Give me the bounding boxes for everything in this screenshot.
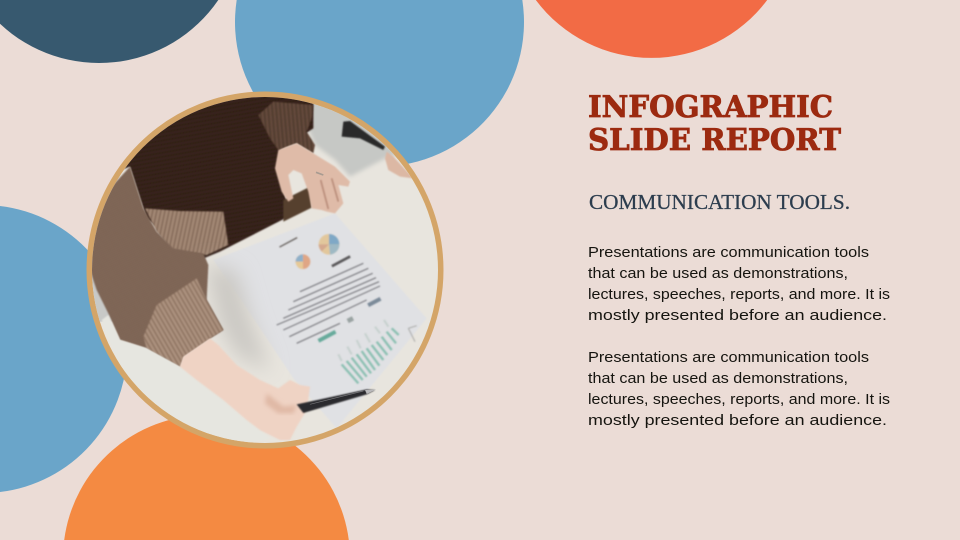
photo: hands over a printed report	[92, 97, 438, 443]
paragraph 2	[588, 350, 890, 429]
title: SLIDE REPORT	[588, 123, 842, 158]
right sleeve	[258, 102, 315, 153]
shadow beneath hand	[283, 187, 312, 222]
pie chart large	[318, 234, 331, 256]
report contents	[277, 234, 417, 383]
lower arm and hand	[180, 338, 310, 440]
paragraph 2: Presentations are communication tools	[588, 350, 869, 366]
bar chart	[342, 328, 399, 383]
photo ring	[90, 94, 440, 446]
left sleeve	[90, 167, 223, 367]
paper	[336, 426, 338, 428]
paragraph 2: that can be used as demonstrations,	[588, 371, 848, 387]
pie chart small	[296, 254, 310, 269]
subtitle: COMMUNICATION TOOLS.	[589, 190, 850, 214]
green stat labels	[318, 330, 336, 343]
circle: blue top centre	[235, 0, 524, 167]
circle: red-orange top right	[536, 0, 767, 58]
grey patch left	[92, 275, 112, 322]
far hand	[385, 152, 413, 178]
upper sleeve band	[145, 208, 228, 255]
text lines	[277, 263, 380, 343]
paragraph 2: lectures, speeches, reports, and more. It is	[588, 392, 890, 408]
lower table corner	[102, 315, 252, 442]
paragraph 1: Presentations are communication tools	[588, 245, 869, 261]
jumper body	[124, 97, 314, 258]
shoe	[342, 121, 385, 150]
pen highlight	[310, 391, 363, 404]
floor	[298, 100, 396, 177]
sleeve cuff	[143, 278, 223, 367]
table surface	[92, 97, 438, 443]
ring on finger	[316, 172, 323, 175]
pen	[297, 389, 375, 413]
shadow on table	[205, 263, 270, 372]
knuckle shadow	[265, 393, 297, 413]
title	[588, 90, 842, 158]
finger shadows	[321, 178, 338, 209]
report heading	[279, 237, 297, 248]
paragraph 1: that can be used as demonstrations,	[588, 266, 848, 282]
paragraph 1: lectures, speeches, reports, and more. It is	[588, 287, 890, 303]
top hand	[275, 143, 350, 213]
circle: blue left	[0, 206, 127, 492]
circle: dark blue top left	[0, 0, 218, 63]
title: INFOGRAPHIC	[588, 90, 833, 125]
paragraph 1: mostly presented before an audience.	[588, 308, 887, 324]
circle: orange bottom	[64, 415, 349, 540]
paragraph 1	[588, 245, 890, 324]
paragraph 2: mostly presented before an audience.	[588, 413, 887, 429]
